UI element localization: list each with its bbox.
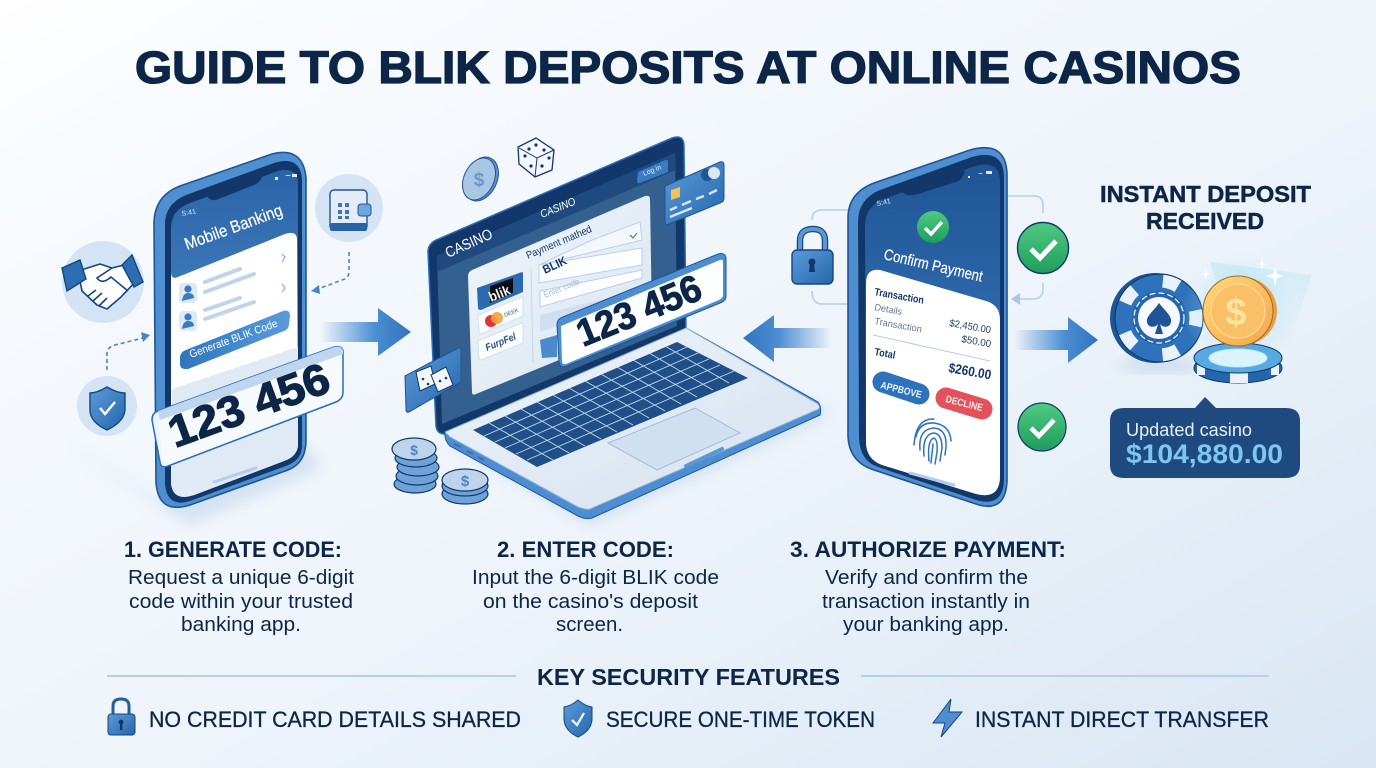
payment panel (468, 196, 652, 395)
flat chip (1194, 343, 1282, 383)
step 2 text: screen. (556, 614, 623, 636)
key security heading: KEY SECURITY FEATURES (537, 664, 840, 690)
transaction details: $50.00 (960, 334, 992, 350)
balance callout (1110, 397, 1300, 478)
step 1 text: 1. GENERATE CODE: (124, 537, 342, 562)
step 3 text: your banking app. (843, 614, 1009, 636)
phone screen (865, 165, 1000, 495)
icon: handshake (62, 241, 144, 323)
step 2 text: Input the 6-digit BLIK code (472, 567, 719, 589)
security feature: one-time token (564, 700, 875, 737)
payment options: blik (486, 282, 513, 305)
account rows (179, 254, 285, 331)
step 1 text: banking app. (181, 614, 301, 636)
check badge with connector (1008, 196, 1068, 305)
arrow: step 1 to step 2 (320, 308, 411, 356)
halo (1182, 252, 1298, 368)
gold coin (1203, 276, 1277, 346)
step 3 illustration: confirm payment phone (792, 148, 1068, 506)
transaction details: Transaction (873, 316, 923, 335)
deposit illustration: chips and coin (1110, 252, 1312, 383)
payment panel: Enter code (542, 276, 581, 300)
transaction details: $260.00 (947, 360, 992, 382)
confirm check (917, 211, 949, 243)
laptop screen: Log in (642, 164, 663, 178)
keyboard (473, 342, 748, 467)
security feature: no card details: NO CREDIT CARD DETAILS SHARED (149, 707, 521, 732)
icon: shield (564, 700, 592, 737)
instant deposit heading (1100, 181, 1311, 234)
payment panel: Payment mathed (524, 223, 594, 262)
security feature: instant transfer: INSTANT DIRECT TRANSFER (975, 707, 1269, 732)
lock with connectors (792, 210, 850, 304)
balance callout: $104,880.00 (1126, 439, 1283, 469)
confirm payment heading: Confirm Payment (882, 246, 985, 286)
step 3 text: Verify and confirm the (825, 567, 1028, 589)
trackpad (608, 408, 740, 470)
step 1 text (124, 537, 354, 636)
home indicator (214, 468, 256, 482)
step 3 text: transaction instantly in (822, 591, 1030, 613)
step 2 text: 2. ENTER CODE: (497, 537, 674, 562)
floating dice (518, 138, 554, 177)
transaction details: Total (873, 346, 896, 362)
floating coin: $ (474, 170, 485, 191)
security feature: one-time token: SECURE ONE-TIME TOKEN (606, 707, 875, 732)
home indicator (910, 473, 954, 485)
icon: wallet (315, 174, 383, 242)
transaction details: $2,450.00 (948, 318, 992, 336)
payment options: FurpFel (484, 332, 518, 354)
step 2 illustration: casino laptop (392, 137, 830, 525)
arrow: step 3 to step 2 (743, 315, 832, 362)
icon: fingerprint (914, 419, 951, 464)
balance callout: Updated casino (1126, 420, 1252, 440)
laptop screen (428, 137, 686, 434)
payment panel: BLIK (540, 253, 569, 277)
icon: shield (77, 376, 137, 436)
dice tile (405, 348, 461, 412)
laptop base (445, 328, 821, 519)
check badge (1018, 403, 1066, 451)
title: GUIDE TO BLIK DEPOSITS AT ONLINE CASINOS (135, 42, 1241, 93)
phone screen: S:41 (876, 198, 892, 208)
button: generate BLIK code: Generate BLIK Code (188, 318, 279, 361)
laptop screen: CASINO (443, 226, 495, 262)
coin stacks: $ (461, 473, 470, 490)
coin stacks: $ (410, 442, 418, 458)
step 3 text (790, 537, 1066, 636)
phone body (848, 148, 1007, 506)
step 1 text: Request a unique 6-digit (128, 567, 354, 589)
phone screen: Mobile Banking (182, 201, 285, 254)
code card: 123 456 (571, 267, 708, 355)
transaction details (873, 286, 992, 382)
icon: lock (108, 699, 135, 735)
payment options (477, 272, 523, 360)
transaction details: Details (873, 302, 903, 318)
sparkles (1201, 258, 1285, 286)
payment options: DEEK (504, 308, 520, 319)
step 3 text: 3. AUTHORIZE PAYMENT: (790, 537, 1066, 562)
decline button: DECLINE (944, 394, 984, 414)
icon: lightning bolt (933, 699, 962, 737)
transaction details: Transaction (873, 286, 925, 307)
coin stacks (392, 438, 488, 504)
arrow: wallet to phone (311, 252, 349, 294)
step 2 text (472, 537, 719, 636)
security feature: instant transfer (933, 699, 1269, 737)
code card: 123 456 (162, 354, 336, 457)
step 2 text: on the casino's deposit (483, 591, 698, 613)
security feature: no card details (108, 699, 521, 735)
phone screen (171, 170, 298, 497)
instant deposit heading: RECEIVED (1146, 208, 1264, 234)
credit card (665, 162, 724, 225)
phone screen: S:41 (181, 209, 197, 218)
gold coin: $ (1225, 292, 1247, 334)
step 1 illustration: mobile banking phone (60, 152, 383, 525)
step 1 text: code within your trusted (129, 591, 353, 613)
arrow: step 3 to deposit (1014, 317, 1098, 363)
code card (557, 254, 726, 367)
laptop screen: CASINO (539, 196, 578, 221)
floating coin (456, 151, 505, 207)
instant deposit heading: INSTANT DEPOSIT (1100, 181, 1311, 207)
phone body (154, 152, 306, 507)
approve button: APPBOVE (879, 380, 923, 401)
arrow: shield to phone (107, 332, 150, 370)
poker chip (1110, 273, 1203, 363)
